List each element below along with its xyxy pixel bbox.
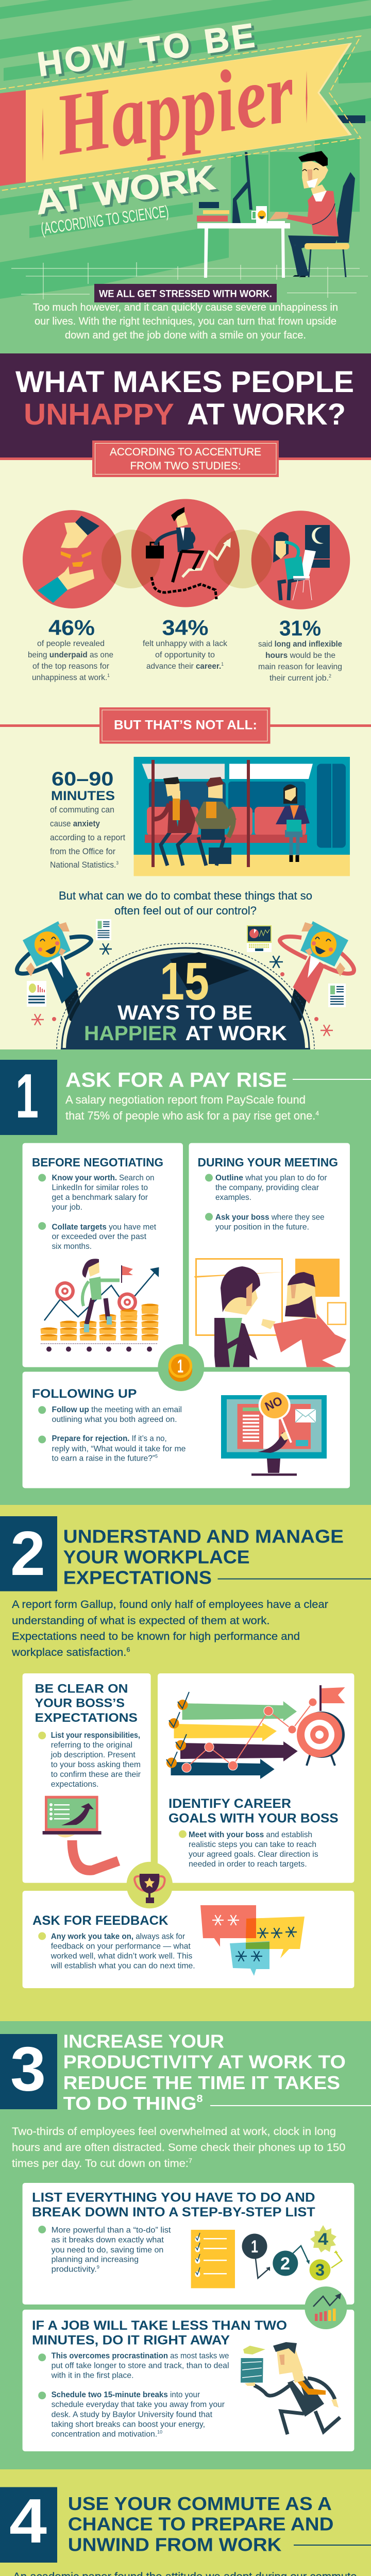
- passenger: middle man: [195, 777, 237, 866]
- but that's not all banner: BUT THAT’S NOT ALL:: [114, 718, 257, 733]
- stat: 31%: 31%: [279, 616, 321, 640]
- heading line: how to be: HOW TO BE: [38, 18, 260, 86]
- number 2: [0, 1516, 57, 1591]
- card: list everything: 9: [97, 2265, 99, 2270]
- heading: what makes people unhappy at work: [15, 365, 354, 431]
- heading: [68, 2493, 371, 2555]
- heading: CHANCE TO PREPARE AND: [68, 2513, 334, 2534]
- card: be clear on your boss's expectations: List your responsibilities,: [51, 1731, 140, 1740]
- card: be clear on your boss's expectations: referring to the original: [51, 1741, 132, 1750]
- icon: woman at night: [273, 525, 330, 600]
- illustration: numbered steps: 4: [318, 2230, 328, 2248]
- card: before negotiating: six months.: [52, 1242, 92, 1251]
- intro paragraph: down and get the job done with a smile on your face.: [65, 330, 306, 341]
- stat: 34%: 1: [221, 662, 224, 667]
- card: list everything: you need to do, saving time on: [52, 2246, 163, 2255]
- script word: happier: Happier: [48, 43, 301, 174]
- accenture badge: ACCORDING TO ACCENTURE: [110, 446, 261, 458]
- card: identify career goals: IDENTIFY CAREER: [168, 1797, 291, 1811]
- card: list everything: as it breaks down exactly what: [52, 2236, 164, 2244]
- intro text: Expectations need to be known for high performance and: [12, 1631, 300, 1642]
- card: list everything: planning and increasing: [52, 2256, 139, 2264]
- floor grid lines: [11, 262, 368, 299]
- section 2: workplace expectations: [0, 1516, 371, 1988]
- card: list everything: BREAK DOWN INTO A STEP-BY-STEP LIST: [32, 2205, 315, 2219]
- number 1: 1: [15, 1061, 39, 1131]
- card: list everything: More powerful than a “to-do” list: [52, 2226, 171, 2235]
- illustration: running man with papers: [241, 2342, 340, 2434]
- intro block: [33, 284, 338, 341]
- number 3: 3: [10, 2034, 46, 2104]
- hero background stripes: [0, 0, 371, 299]
- accenture badge: [92, 440, 279, 477]
- stat: 34%: advance their career.: [146, 662, 223, 671]
- card: during your meeting: Outline what you plan to do for: [215, 1174, 327, 1182]
- heading: EXPECTATIONS: [63, 1567, 212, 1588]
- heading: YOUR WORKPLACE: [63, 1547, 250, 1568]
- intro text: [12, 2126, 345, 2170]
- heading: USE YOUR COMMUTE AS A: [68, 2493, 332, 2514]
- card: ask for feedback: feedback on your performance — what: [51, 1942, 191, 1951]
- card: ask for feedback: will establish what you can do next time.: [50, 1961, 195, 1970]
- chair: [309, 172, 355, 277]
- mug: [252, 206, 267, 223]
- intro text: A salary negotiation report from PayScale found: [65, 1093, 306, 1106]
- card: be clear on your boss's expectations: YOUR BOSS’S: [35, 1697, 125, 1710]
- intro text: that 75% of people who ask for a pay rise get one.: [65, 1109, 317, 1122]
- passenger: left man: [154, 777, 196, 866]
- stat: 46%: 46%: [48, 615, 95, 640]
- intro text: hours and are often distracted. Some check their phones up to 150: [12, 2142, 345, 2154]
- intro text: A report form Gallup, found only half of employees have a clear: [12, 1599, 328, 1611]
- stat: 46%: of the top reasons for: [32, 662, 110, 671]
- card: two minute rule: with it in the first place.: [51, 2371, 134, 2380]
- illustration: two smiling men on the dome: [17, 919, 354, 1036]
- banner ribbon: [0, 36, 361, 191]
- icon: hands and coins: [38, 516, 99, 603]
- number 2: 2: [10, 1518, 45, 1588]
- number 4: [0, 2486, 57, 2563]
- section 4: commute: [0, 2486, 371, 2576]
- card: identify career goals: [158, 1673, 354, 1883]
- intro paragraph: our lives. With the right techniques, you can turn that frown upside: [35, 316, 336, 327]
- heading: UNDERSTAND AND MANAGE: [63, 1526, 344, 1547]
- section 1: ask for a pay rise: [0, 1060, 371, 1488]
- hero illustration: man at desk: [197, 115, 365, 278]
- right man with smile mask: [280, 921, 354, 1024]
- intro text: 6: [126, 1646, 130, 1653]
- left man with smile mask: [17, 921, 91, 1024]
- intro heading bar: WE ALL GET STRESSED WITH WORK.: [99, 289, 272, 300]
- stat: 46%: unhappiness at work.: [32, 673, 110, 682]
- card: before negotiating: get a benchmark salary for: [52, 1193, 148, 1202]
- card: before negotiating: your job.: [52, 1203, 82, 1212]
- card: during your meeting: your position in the future.: [215, 1223, 309, 1231]
- card: following up: Follow up the meeting with an email: [52, 1405, 182, 1414]
- card: be clear on your boss's expectations: to your boss asking them: [51, 1760, 141, 1769]
- heading line: at work: AT WORK: [33, 158, 217, 222]
- stat: 46%: of people revealed: [37, 639, 105, 648]
- illustration: monitor with no sign: [221, 1390, 327, 1476]
- passenger: standing woman: [276, 784, 310, 862]
- illustration: commuter train: [134, 757, 350, 876]
- stat: 60-90 minutes: MINUTES: [51, 789, 115, 803]
- stat: 46%: being underpaid as one: [28, 651, 113, 659]
- card: two minute rule: [23, 2310, 354, 2451]
- card: during your meeting: [189, 1143, 350, 1367]
- card: before negotiating: or exceeded over the past: [52, 1232, 147, 1241]
- intro paragraph: Too much however, and it can quickly cause severe unhappiness in: [33, 302, 338, 313]
- badge: trophy: [126, 1862, 173, 1908]
- card: following up: FOLLOWING UP: [32, 1387, 137, 1401]
- intro heading bar: [94, 284, 277, 302]
- card: be clear on your boss's expectations: to confirm these are their: [51, 1770, 141, 1779]
- card: two minute rule: MINUTES, DO IT RIGHT AWAY: [32, 2333, 230, 2348]
- heading: what makes people unhappy at work: UNHAPPY: [24, 398, 174, 431]
- illustration: numbered steps: 1: [251, 2237, 258, 2257]
- heading: PRODUCTIVITY AT WORK TO: [63, 2052, 346, 2073]
- card: two minute rule: This overcomes procrastination as most tasks we: [52, 2351, 229, 2361]
- accenture badge: FROM TWO STUDIES:: [130, 460, 241, 472]
- intro text: [65, 1093, 319, 1122]
- card: be clear on your boss's expectations: job description. Present: [50, 1751, 136, 1759]
- card: be clear on your boss's expectations: BE CLEAR ON: [35, 1682, 128, 1696]
- stat: 60-90 minutes: of commuting can: [50, 805, 114, 815]
- badge: coin: 1: [177, 1355, 183, 1377]
- stat: 60-90 minutes: from the Office for: [50, 846, 115, 856]
- illustration: monitor with no sign: NO: [263, 1394, 284, 1414]
- card: before negotiating: LinkedIn for similar roles to: [52, 1183, 148, 1192]
- heading: ASK FOR A PAY RISE: [65, 1069, 287, 1092]
- card: two minute rule: put off take longer to store and track, than to deal: [52, 2361, 229, 2370]
- heading: what makes people unhappy at work: AT WORK?: [187, 398, 346, 431]
- man: [267, 151, 349, 277]
- card: before negotiating: BEFORE NEGOTIATING: [32, 1156, 163, 1169]
- monitor: [232, 115, 365, 223]
- floating documents and decorations: [27, 919, 346, 1036]
- heading: [63, 2031, 371, 2114]
- intro text: Two-thirds of employees feel overwhelmed at work, clock in long: [12, 2126, 336, 2138]
- dome heading: 15 ways to be happier at work: WAYS TO BE: [117, 1002, 252, 1024]
- intro text: 7: [189, 2157, 192, 2164]
- stat: 34%: felt unhappy with a lack: [143, 639, 228, 648]
- card: be clear on your boss's expectations: EXPECTATIONS: [35, 1711, 138, 1725]
- stat: 31%: 2: [329, 673, 331, 679]
- card: identify career goals: Meet with your boss and establish: [189, 1831, 312, 1839]
- illustration: checklist: [191, 2230, 235, 2288]
- card: identify career goals: needed in order to reach targets.: [189, 1860, 307, 1869]
- card: identify career goals: realistic steps you can take to reach: [189, 1840, 316, 1849]
- stat: 60-90 minutes: 60–90: [52, 769, 113, 790]
- intro paragraph: [33, 302, 338, 341]
- intro text: 4: [315, 1110, 319, 1117]
- card: ask for feedback: ASK FOR FEEDBACK: [32, 1913, 168, 1928]
- card: before negotiating: [23, 1143, 183, 1367]
- card: list everything: LIST EVERYTHING YOU HAVE TO DO AND: [32, 2191, 315, 2205]
- intro text: [11, 1599, 328, 1658]
- question text: [59, 889, 312, 917]
- stat: 46%: 1: [107, 673, 110, 678]
- heading: UNWIND FROM WORK: [68, 2534, 282, 2555]
- title: how to be happier at work: [0, 15, 361, 238]
- card: following up: [23, 1371, 350, 1488]
- heading: 8: [197, 2093, 203, 2105]
- number 4: 4: [9, 2486, 47, 2556]
- card: list everything: productivity.: [52, 2265, 95, 2274]
- poles: [151, 760, 250, 867]
- stat: 31%: main reason for leaving: [258, 663, 342, 671]
- number 3: [0, 2034, 57, 2109]
- card: following up: to earn a raise in the future?”: [52, 1454, 158, 1463]
- card: during your meeting: the company, providing clear: [215, 1183, 319, 1192]
- stat: 34%: 34%: [162, 615, 208, 640]
- card: before negotiating: Know your worth. Search on: [52, 1174, 155, 1182]
- dome heading: 15 ways to be happier at work: HAPPIER: [84, 1022, 177, 1045]
- books: [197, 202, 229, 222]
- dome heading: 15 ways to be happier at work: 15: [160, 952, 209, 1011]
- heading line: at work: AT WORK: [36, 160, 220, 224]
- heading: what makes people unhappy at work: WHAT MAKES PEOPLE: [15, 365, 354, 399]
- stat: 60-90 minutes: 3: [116, 860, 119, 866]
- illustration: arrows and target: [166, 1685, 345, 1779]
- card: two minute rule: IF A JOB WILL TAKE LESS THAN TWO: [32, 2318, 287, 2333]
- card: during your meeting: Ask your boss where they see: [215, 1213, 325, 1222]
- badge: chart: [305, 2286, 347, 2329]
- card: be clear on your boss's expectations: expectations.: [51, 1780, 99, 1789]
- card: two minute rule: Schedule two 15-minute breaks into your: [52, 2391, 200, 2399]
- card: during your meeting: DURING YOUR MEETING: [198, 1156, 338, 1169]
- intro text: understanding of what is expected of them at work.: [12, 1615, 270, 1627]
- card: two minute rule: desk. A study by Baylor University found that: [52, 2410, 213, 2419]
- card: before negotiating: Collate targets you have met: [52, 1223, 157, 1231]
- card: during your meeting: examples.: [215, 1193, 251, 1202]
- illustration: woman climbing coin stacks: [40, 1259, 159, 1352]
- number 1: [0, 1060, 57, 1135]
- card: following up: Prepare for rejection. If it’s a no,: [52, 1434, 167, 1443]
- card: following up: outlining what you both agreed on.: [52, 1415, 177, 1424]
- card: following up: reply with, “What would it take for me: [52, 1445, 186, 1453]
- but that's not all banner: [0, 707, 371, 744]
- subtitle: (ACCORDING TO SCIENCE): [40, 201, 170, 238]
- icon: chained man: [146, 507, 231, 599]
- card: two minute rule: taking short breaks can boost your energy,: [52, 2420, 205, 2429]
- stat: 60-90 minutes: cause anxiety: [50, 819, 100, 828]
- question text: But what can we do to combat these things that so: [59, 889, 312, 902]
- heading: TO DO THING: [63, 2093, 186, 2114]
- dome heading: 15 ways to be happier at work: AT WORK: [185, 1022, 287, 1045]
- desk: [197, 223, 290, 278]
- illustration: speech bubbles: [200, 1905, 305, 1976]
- section 3: productivity: [0, 2031, 371, 2451]
- heading: INCREASE YOUR: [63, 2031, 224, 2052]
- intro text: workplace satisfaction.: [12, 1647, 121, 1658]
- stat: 31%: [258, 616, 342, 683]
- stat: 46%: [28, 615, 113, 682]
- card: identify career goals: GOALS WITH YOUR BOSS: [168, 1811, 339, 1826]
- stat: 31%: their current job.: [269, 674, 329, 683]
- card: following up: 5: [155, 1454, 158, 1459]
- illustration: laptop on arm: [43, 1796, 119, 1870]
- question text: often feel out of our control?: [114, 904, 257, 917]
- stat: 60-90 minutes: [50, 769, 125, 870]
- stat: 34%: [143, 615, 228, 671]
- card: list everything: [23, 2183, 354, 2304]
- stat: 34%: of opportunity to: [155, 651, 215, 659]
- dome heading: 15 ways to be happier at work: [57, 943, 314, 1049]
- stat: 31%: said long and inflexible: [258, 640, 342, 649]
- heading: [63, 1526, 371, 1588]
- card: be clear on your boss's expectations: [23, 1673, 151, 1883]
- card: ask for feedback: worked well, what didn’t work well. This: [50, 1952, 192, 1960]
- badge: coin: [158, 1344, 204, 1391]
- stat: 60-90 minutes: National Statistics.: [50, 860, 122, 870]
- heading: REDUCE THE TIME IT TAKES: [63, 2072, 340, 2093]
- illustration: numbered steps: [242, 2225, 342, 2280]
- heading line: how to be: HOW TO BE: [35, 16, 257, 83]
- three stat circles: [23, 499, 350, 609]
- illustration: woman and bearded man talking: [194, 1259, 346, 1367]
- stat: 60-90 minutes: according to a report: [50, 833, 125, 842]
- card: identify career goals: your agreed goals. Clear direction is: [189, 1850, 318, 1859]
- intro text: times per day. To cut down on time:: [12, 2158, 181, 2170]
- card: two minute rule: concentration and motivation.: [52, 2430, 159, 2438]
- card: two minute rule: schedule everyday that take you away from your: [52, 2400, 225, 2409]
- card: two minute rule: 10: [157, 2429, 162, 2434]
- card: ask for feedback: [23, 1891, 354, 1988]
- card: ask for feedback: Any work you take on, always ask for: [51, 1933, 185, 1941]
- illustration: numbered steps: 2: [280, 2254, 290, 2274]
- stat: 31%: hours would be the: [265, 651, 335, 660]
- illustration: numbered steps: 3: [315, 2261, 325, 2279]
